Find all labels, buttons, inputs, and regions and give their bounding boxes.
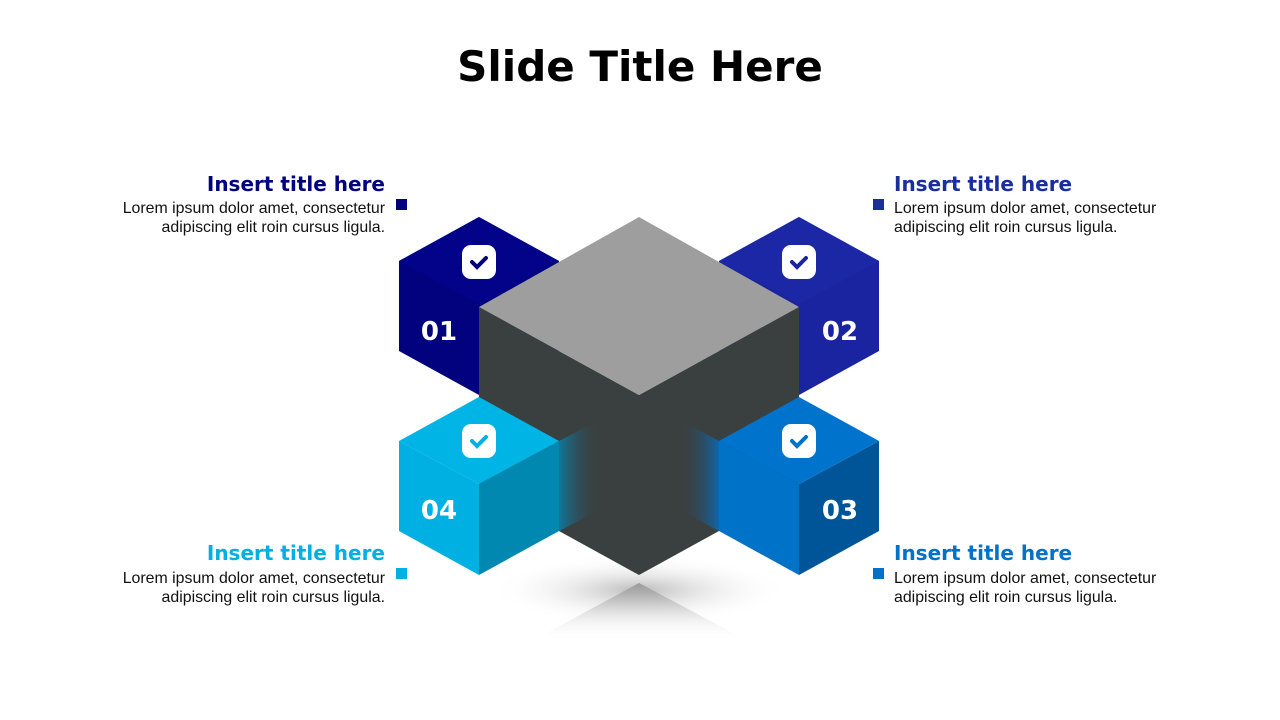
text block 04 [123,541,407,606]
text: Lorem ipsum dolor amet, consectetur [123,200,385,217]
text block 02 [873,172,1156,236]
shadow [489,555,789,642]
text: Insert title here [894,172,1072,196]
title: Slide Title Here [457,42,823,91]
glows [559,420,719,531]
text: adipiscing elit roin cursus ligula. [162,219,385,236]
cube 01 [399,217,559,395]
text: Insert title here [207,172,385,196]
cube 02 [719,217,879,395]
cube 04: 04 [421,496,457,526]
cube 02: 02 [822,317,858,347]
text block 01 [123,172,407,236]
text block 03 [873,541,1156,606]
text: Lorem ipsum dolor amet, consectetur [894,200,1156,217]
text: Lorem ipsum dolor amet, consectetur [894,570,1156,587]
text: adipiscing elit roin cursus ligula. [894,589,1117,606]
text: Insert title here [207,541,385,565]
cube 04 [399,397,559,575]
text: adipiscing elit roin cursus ligula. [162,589,385,606]
text: Insert title here [894,541,1072,565]
cube 03: 03 [822,496,858,526]
central cube [479,217,799,575]
text: Lorem ipsum dolor amet, consectetur [123,570,385,587]
cube 03 [719,397,879,575]
text: adipiscing elit roin cursus ligula. [894,219,1117,236]
cube 01: 01 [421,317,457,347]
